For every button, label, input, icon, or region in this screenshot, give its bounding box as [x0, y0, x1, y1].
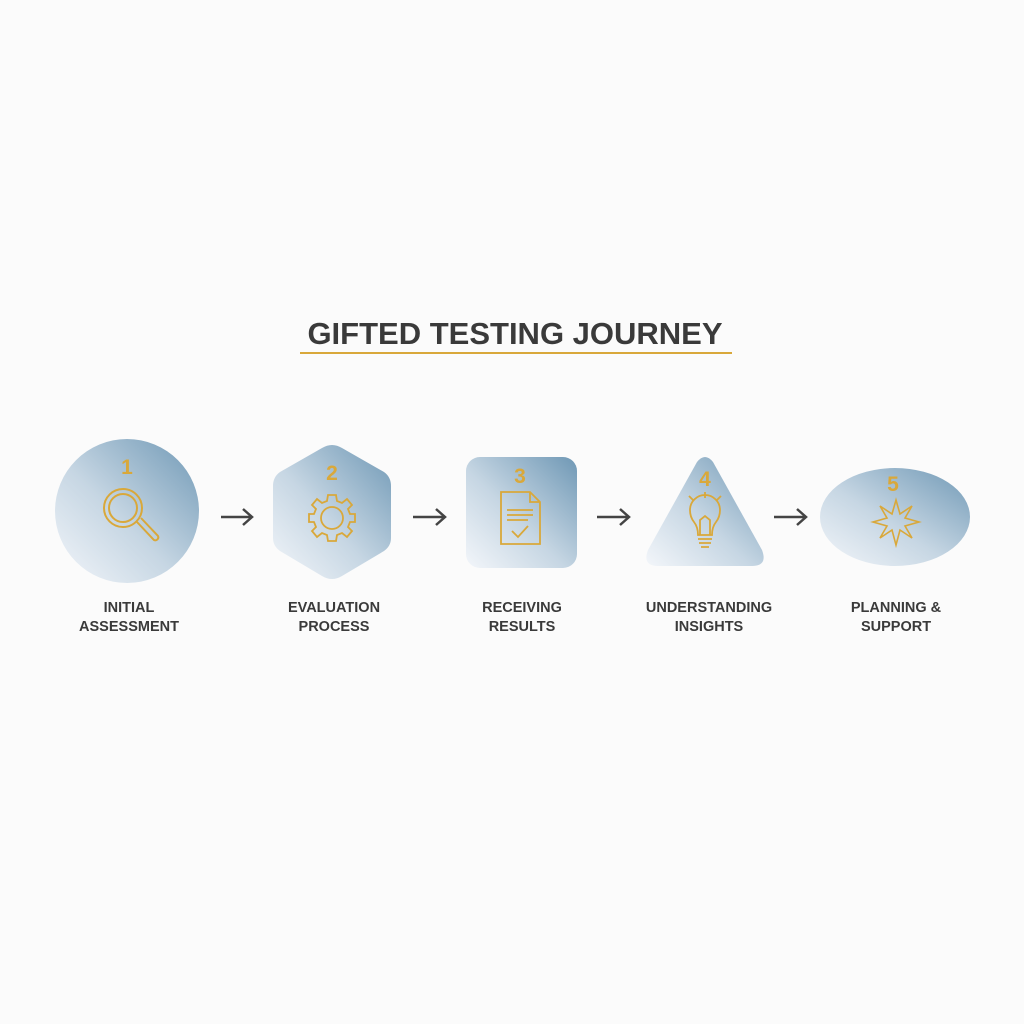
step 1: initial assessment [55, 439, 199, 635]
step 3: receiving results [466, 457, 577, 635]
step 4: understanding insights [646, 457, 772, 635]
arrow 3 [597, 509, 629, 525]
step 3: receiving results: RESULTS [489, 619, 556, 635]
step 4: understanding insights: INSIGHTS [675, 619, 744, 635]
icon: lightbulb [689, 492, 721, 547]
step 4: understanding insights: 4 [699, 468, 711, 491]
arrow 1 [221, 509, 252, 525]
step 2: evaluation process: PROCESS [299, 619, 370, 635]
step 2: evaluation process: EVALUATION [288, 600, 380, 616]
icon: gear [309, 495, 355, 541]
step 5: planning & support [820, 468, 970, 635]
title: GIFTED TESTING JOURNEY [307, 316, 723, 351]
step 3: receiving results: 3 [514, 465, 526, 488]
step 3: receiving results: RECEIVING [482, 600, 562, 616]
icon: star burst [873, 500, 919, 545]
step 5: planning & support: 5 [887, 473, 899, 496]
step 1: initial assessment: INITIAL [104, 600, 155, 616]
step 1: initial assessment: 1 [121, 456, 133, 479]
step 4: understanding insights: UNDERSTANDING [646, 600, 772, 616]
step 2: evaluation process: 2 [326, 462, 338, 485]
step 2: evaluation process [273, 445, 391, 635]
step 1: initial assessment: ASSESSMENT [79, 619, 179, 635]
icon: magnifier [104, 489, 158, 540]
icon: document [501, 492, 540, 544]
step 5: planning & support: PLANNING & [851, 600, 942, 616]
arrow 4 [774, 509, 806, 525]
arrow 2 [413, 509, 445, 525]
step 5: planning & support: SUPPORT [861, 619, 931, 635]
